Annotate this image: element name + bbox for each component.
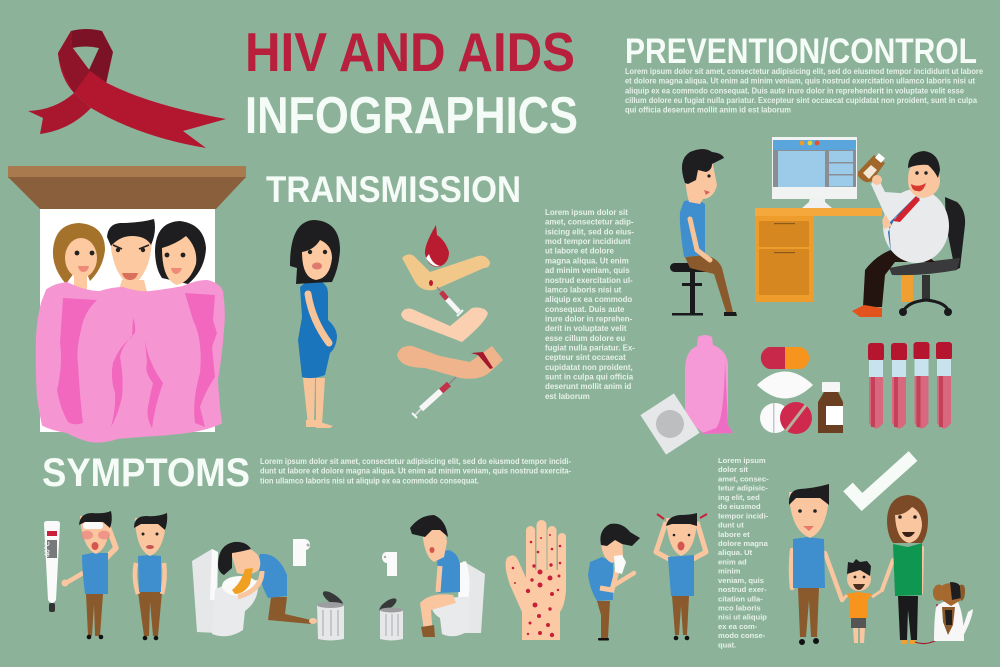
- heading: symptoms: SYMPTOMS: [42, 451, 250, 495]
- illustration: man with headache: [656, 513, 707, 640]
- toilet: [432, 561, 485, 636]
- text block: transmission: derit in voluptate velit: [545, 324, 627, 333]
- text block: right column: ex ea com-: [718, 622, 758, 631]
- text block: right column: nisi ut aliquip: [718, 613, 767, 622]
- icon: check mark: [848, 456, 913, 502]
- chair: [889, 197, 965, 316]
- text block: right column: dolor sit: [718, 465, 748, 474]
- text block: transmission: mod tempor incididunt: [545, 237, 631, 246]
- child: [842, 559, 881, 643]
- illustration: middle arm: [401, 308, 488, 342]
- text block: right column: quat.: [718, 640, 736, 649]
- text block: symptoms: tion ullamco laboris nisi ut aliquip ex ea commodo consequat.: [260, 475, 479, 485]
- text block: transmission: est laborum: [545, 392, 590, 401]
- icon: pills and tablets: [757, 347, 813, 434]
- text block: prevention: qui officia deserunt mollit anim id est laborum: [625, 105, 791, 115]
- text block: transmission: Lorem ipsum dolor sit: [545, 208, 628, 217]
- title: [245, 21, 578, 145]
- mother: [882, 495, 928, 644]
- heading: transmission: TRANSMISSION: [266, 169, 521, 210]
- illustration: man vomiting over toilet: [192, 542, 317, 636]
- text block: symptoms: Lorem ipsum dolor sit amet, consectetur adipisicing elit, sed do eiusmod tempor incidi-: [260, 456, 571, 466]
- text block: right column: aliqua. Ut: [718, 548, 753, 557]
- illustration: doctor holding bottle: [852, 151, 965, 317]
- icon: toilet paper roll: [293, 539, 310, 566]
- left woman: [53, 223, 105, 290]
- text block: right column: Lorem ipsum: [718, 456, 766, 465]
- text block: right column: ing elit, sed: [718, 493, 760, 502]
- illustration: sick man standing: [134, 513, 167, 640]
- text block: transmission: lamco laboris nisi ut: [545, 285, 622, 294]
- text block: prevention: [625, 66, 983, 115]
- right woman: [155, 221, 206, 285]
- text block: transmission: amet, consectetur adip-: [545, 218, 634, 227]
- text block: right column: enim ad: [718, 557, 747, 566]
- illustration: healthy family with dog: [789, 484, 973, 645]
- icon: medicine bottle: [818, 382, 843, 433]
- illustration: computer monitor: [772, 137, 857, 208]
- vomit: [232, 568, 253, 594]
- text block: transmission: ut labore et dolore: [545, 247, 614, 256]
- text block: transmission: aliquip ex ea commodo: [545, 295, 632, 304]
- leash: [915, 604, 937, 644]
- text block: transmission: deserunt mollit anim id: [545, 382, 632, 391]
- man: [107, 219, 155, 292]
- text block: right column: dolore magna: [718, 539, 769, 548]
- text block: transmission: fugiat nulla pariatur. Ex-: [545, 344, 635, 352]
- illustration: arm with tourniquet and syringe: [397, 346, 503, 418]
- pink blanket: [37, 281, 224, 442]
- text block: right column: amet, consec-: [718, 474, 769, 483]
- text block: transmission: isicing elit, sed do eius-: [545, 227, 634, 236]
- text block: symptoms: dunt ut labore et dolore magna aliqua. Ut enim ad minim veniam, quis nostrud exercita-: [260, 466, 571, 476]
- text block: right column: labore et: [718, 530, 750, 539]
- icon: trash bin open: [378, 596, 403, 640]
- text block: right column: citation ulla-: [718, 594, 763, 603]
- text block: symptoms: [260, 456, 571, 485]
- text block: right column: minim: [718, 567, 741, 576]
- text block: right column: dunt ut: [718, 520, 744, 530]
- text block: right column: nostrud exer-: [718, 585, 767, 594]
- illustration: bed with three people under blanket: [8, 166, 246, 442]
- illustration: patient on stool: [670, 149, 737, 316]
- icon: thermometer: 40°C: [44, 541, 52, 557]
- text block: transmission: sunt in culpa qui officia: [545, 373, 634, 382]
- text block: transmission: esse cillum dolore eu: [545, 334, 625, 343]
- icon: trash bin open: [317, 588, 345, 640]
- icon: thermometer: [44, 521, 60, 612]
- text block: right column: tetur adipisic-: [718, 484, 768, 493]
- text block: transmission: consequat. Duis aute: [545, 305, 625, 314]
- text block: transmission: irure dolor in reprehen-: [545, 314, 633, 324]
- illustration: man with fever: [62, 511, 116, 639]
- dog: [933, 582, 973, 641]
- illustration: pregnant woman: [290, 220, 340, 428]
- text block: transmission: nostrud exercitation ul-: [545, 276, 633, 285]
- icon: condom and packet: [640, 335, 733, 455]
- icon: blood test tubes: [868, 342, 952, 428]
- illustration: desk: [755, 208, 913, 302]
- illustration: blood drop and arm with syringe: [402, 225, 490, 316]
- icon: toilet paper roll: [382, 552, 397, 576]
- title: HIV AND AIDS: [245, 21, 575, 83]
- illustration: man on toilet with diarrhea: [410, 515, 485, 637]
- text block: right column: veniam, quis: [718, 576, 764, 585]
- medicine bottle: [858, 153, 885, 182]
- text block: transmission: ad minim veniam, quis: [545, 266, 630, 275]
- text block: transmission: magna aliqua. Ut enim: [545, 256, 629, 265]
- text block: right column: modo conse-: [718, 631, 766, 640]
- text block: right column: mco laboris: [718, 604, 761, 612]
- text block: right column: do eiusmod: [718, 502, 761, 511]
- father: [789, 484, 842, 645]
- text block: transmission: cepteur sint occaecat: [545, 353, 626, 362]
- illustration: hand with rash: [506, 520, 566, 640]
- illustration: man coughing: [588, 524, 640, 640]
- icon: red awareness ribbon: [28, 29, 226, 148]
- text block: transmission: cupidatat non proident,: [545, 363, 633, 372]
- text block: prevention: aliquip ex ea commodo consequat. Duis aute irure dolor in reprehenderit in voluptate velit esse: [625, 85, 964, 95]
- toilet: [192, 549, 258, 636]
- text block: transmission: [545, 208, 635, 401]
- text block: right column: [718, 456, 769, 649]
- text block: right column: tempor incidi-: [718, 511, 769, 520]
- title: INFOGRAPHICS: [245, 87, 578, 145]
